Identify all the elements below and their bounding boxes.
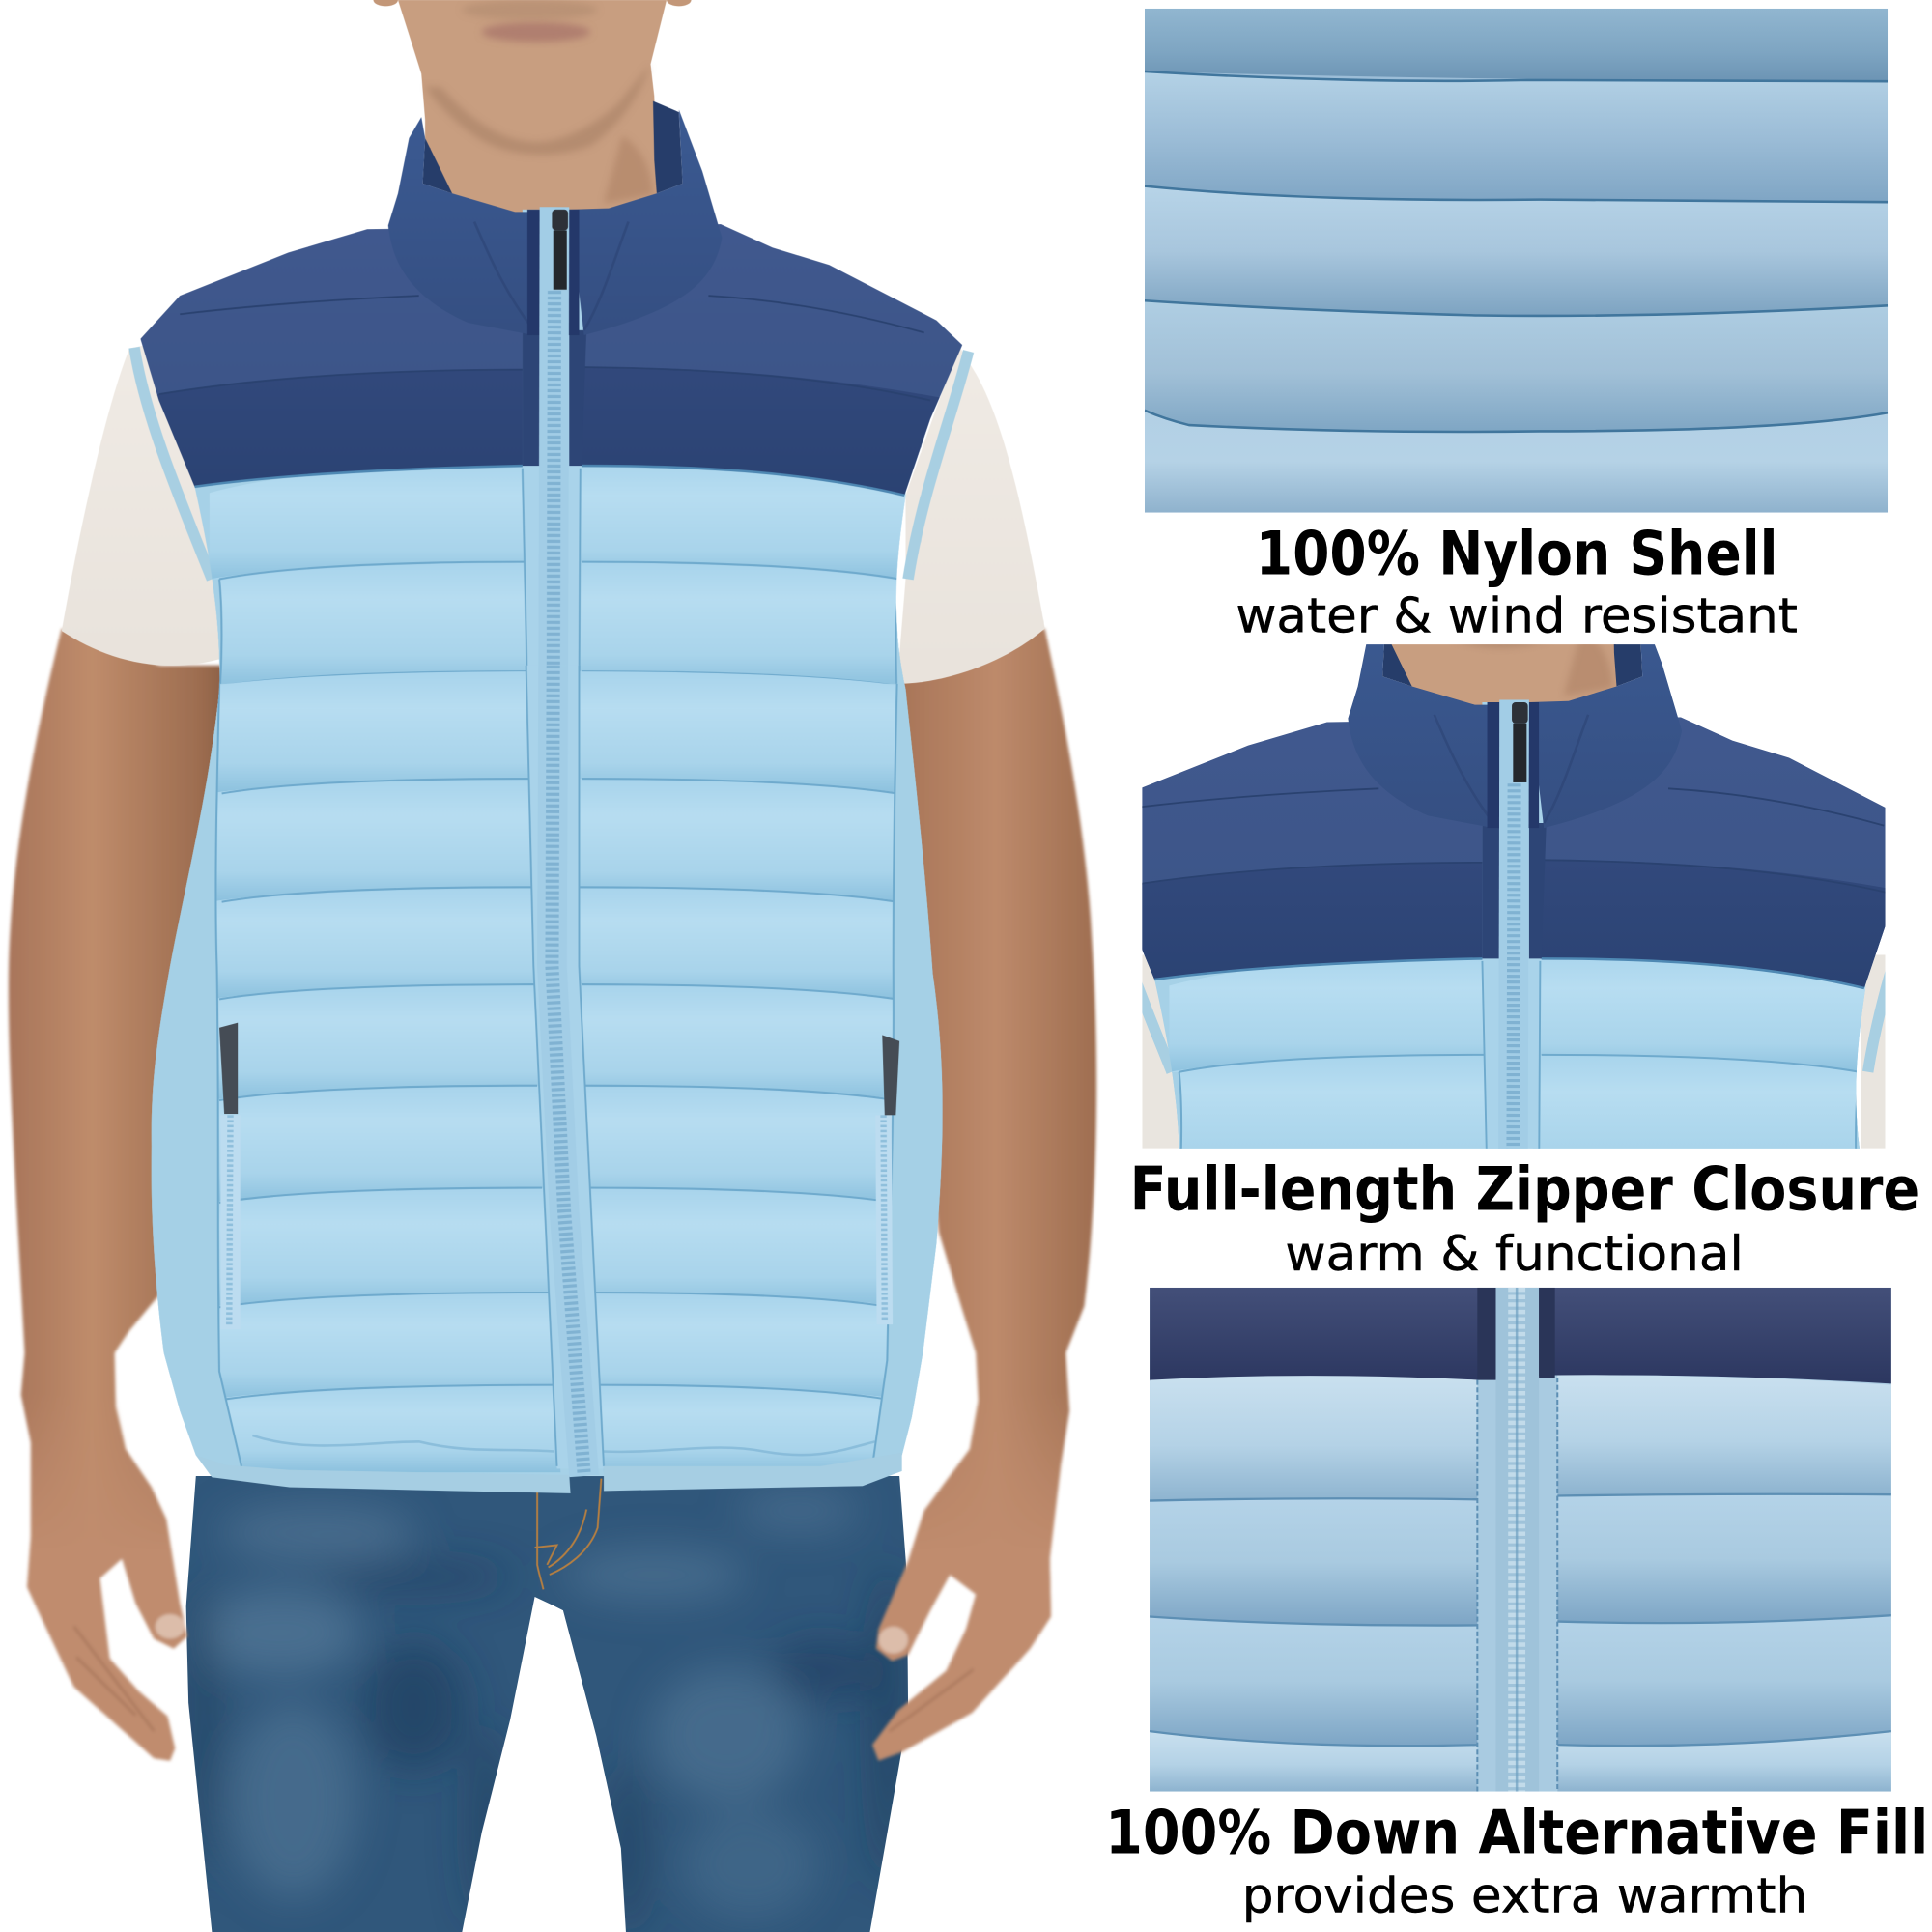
dark zipper edges [1477,1288,1555,1380]
right placket [1539,1380,1557,1792]
dark upper placket [523,330,586,466]
caption: water and wind resistant: water & wind resistant [1236,587,1798,643]
navy yoke [1150,1288,1891,1383]
right sleeve [897,345,1045,684]
yoke [124,210,985,505]
side panels upper [124,579,221,696]
quilted bands [1150,1375,1891,1792]
panel: down alternative fill close-up [1150,1288,1891,1792]
panel: nylon shell close-up [1145,9,1888,513]
upper vest body [124,456,985,696]
cropped vest view [1083,487,1932,1189]
seams [1150,1494,1891,1746]
placket stitching [526,666,604,1466]
placket stitches [1477,1378,1557,1792]
side panels [151,699,240,1466]
placket stitching upper [523,469,581,690]
hem ruffles [252,1435,875,1455]
fly stitching [535,1479,601,1589]
left sleeve [62,345,228,666]
hem band [196,1453,902,1493]
caption: provides extra warmth: provides extra warmth [1242,1868,1807,1924]
zipper [1495,1288,1539,1792]
left pocket zipper [219,1023,238,1329]
heading: 100% Nylon Shell: 100% Nylon Shell [1256,518,1778,588]
thumbnail left [156,1614,185,1638]
seam lines [219,562,899,696]
left finger creases [74,1627,154,1731]
quilted panels [210,458,906,686]
upper vest, neck and face [124,0,985,696]
photo: man wearing vest [9,0,1096,1932]
placket [1477,1380,1495,1792]
armhole trim [134,348,969,579]
quilted bands [1145,9,1888,513]
thumbnail right [878,1627,908,1654]
right finger creases [890,1669,974,1731]
stitching [1145,71,1888,432]
collar [388,101,722,335]
shirt glimpses [1142,955,1886,1149]
upper placket [523,210,586,690]
yoke-to-body seam [195,466,904,496]
quilted panels [210,671,906,1472]
seam lines [219,779,897,1400]
face and neck [373,0,692,222]
left arm and hand [9,629,246,1761]
zipper pull [552,210,568,290]
lower placket [526,666,604,1468]
right pocket zipper [882,1035,899,1324]
caption: warm and functional: warm & functional [1285,1226,1744,1282]
left hand tone [25,1392,187,1761]
right arm and hand [872,629,1096,1761]
right hand tone [872,1392,1069,1761]
jeans [173,1466,924,1932]
main zipper [552,666,584,1476]
panel: zipper close-up [1083,487,1932,1189]
lower vest body [124,666,985,1497]
